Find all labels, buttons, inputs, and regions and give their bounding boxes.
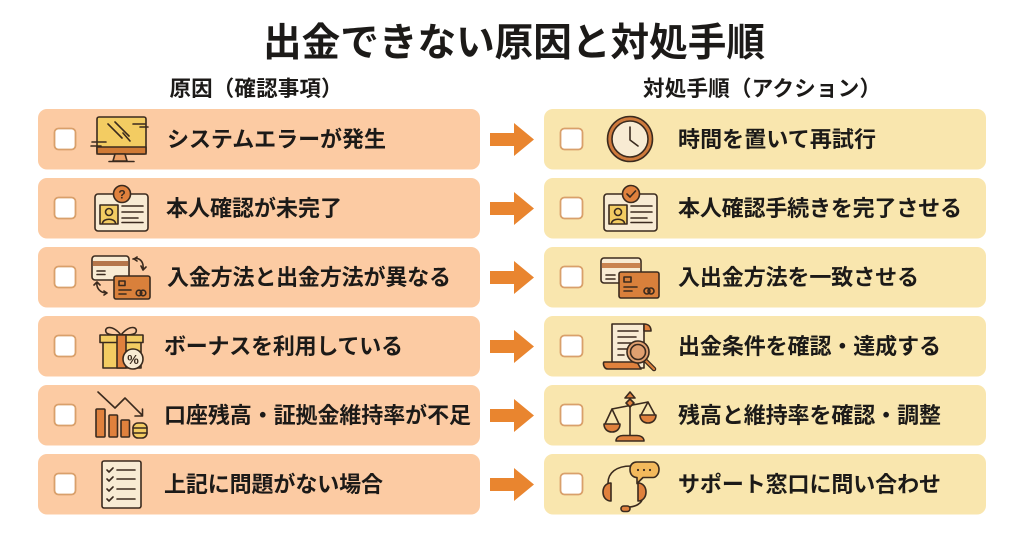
row 6: cause [38, 454, 480, 514]
row 4: cause [38, 316, 480, 376]
icon: gift with percent [100, 328, 143, 369]
label: 本人確認手続きを完了させる [678, 196, 962, 221]
icon: checklist [102, 461, 141, 508]
label: 出金条件を確認・達成する [678, 334, 941, 359]
arrow 3 [490, 261, 534, 294]
row 6: action [544, 454, 986, 514]
icon: two cards exchange [92, 256, 150, 299]
arrow 5 [490, 399, 534, 432]
heading: actions: 対処手順（アクション） [643, 77, 881, 101]
label: 口座残高・証拠金維持率が不足 [164, 403, 471, 428]
icon: document with magnifier [603, 324, 654, 369]
row 5: cause [38, 385, 480, 446]
arrow 1 [490, 123, 534, 156]
icon: monitor with error [91, 117, 148, 162]
icon: ID card with check [604, 186, 657, 231]
label: 残高と維持率を確認・調整 [678, 403, 941, 428]
icon: ID card with question [95, 186, 148, 231]
row 5: action [544, 385, 986, 446]
arrow 2 [490, 192, 534, 225]
label: ボーナスを利用している [164, 334, 403, 359]
label: 上記に問題がない場合 [164, 472, 383, 497]
label: サポート窓口に問い合わせ [678, 472, 941, 497]
label: 時間を置いて再試行 [678, 127, 876, 152]
label: 本人確認が未完了 [166, 196, 342, 221]
heading: causes: 原因（確認事項） [170, 77, 342, 101]
arrow 6 [490, 468, 534, 501]
row 3: action [544, 247, 986, 308]
icon: falling chart with coins [96, 392, 147, 438]
icon: balance scale [604, 392, 656, 441]
title: 出金できない原因と対処手順 [263, 22, 765, 65]
icon: ID card with question: ? [118, 188, 126, 202]
icon: clock [608, 116, 652, 162]
row 4: action [544, 316, 986, 376]
icon: gift with percent: % [127, 352, 139, 367]
arrow 4 [490, 330, 534, 363]
label: 入金方法と出金方法が異なる [167, 265, 451, 290]
row 2: cause [38, 178, 480, 238]
row 2: action [544, 178, 986, 238]
label: システムエラーが発生 [167, 127, 386, 152]
row 1: cause [38, 109, 480, 170]
row 1: action [544, 109, 986, 170]
row 3: cause [38, 247, 480, 308]
icon: two cards [601, 258, 659, 298]
icon: headset with chat bubble [603, 462, 659, 512]
label: 入出金方法を一致させる [678, 265, 919, 290]
